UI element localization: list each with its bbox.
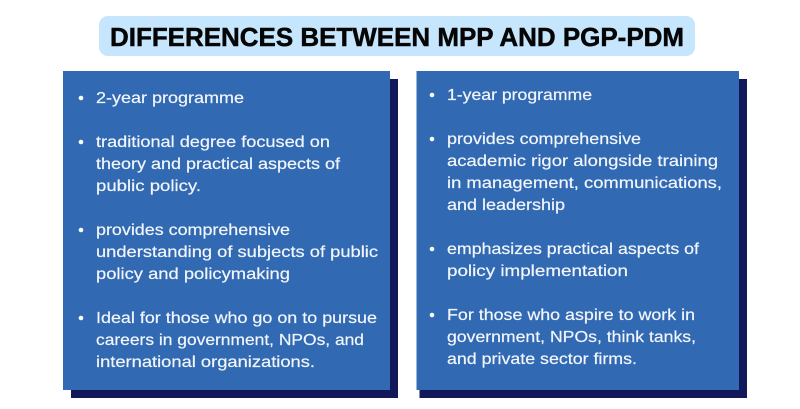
bullet: aspire to work: and private sector firms.: [447, 351, 637, 368]
bullet: comprehensive understanding: provides comprehensive: [96, 222, 290, 239]
bullet: practical aspects: policy implementation: [447, 263, 628, 280]
bullet: academic rigor: [430, 131, 722, 214]
bullet: academic rigor: and leadership: [447, 197, 565, 214]
bullet: traditional degree: [79, 134, 341, 195]
bullet: ideal for: international organizations.: [96, 354, 315, 371]
bullet: practical aspects: emphasizes practical aspects of: [447, 241, 700, 258]
bullet: comprehensive understanding: understanding of subjects of public: [96, 244, 378, 261]
bullet: aspire to work: [430, 307, 696, 368]
bullet: academic rigor: academic rigor alongside training: [447, 153, 718, 170]
bullet: aspire to work: For those who aspire to work in: [447, 307, 695, 324]
bullet: 2-year programme: 2-year programme: [96, 90, 244, 107]
bullet: comprehensive understanding: [79, 222, 378, 283]
bullet: academic rigor: provides comprehensive: [447, 131, 641, 148]
bullet: ideal for: Ideal for those who go on to pursue: [96, 310, 377, 327]
bullet: comprehensive understanding: policy and policymaking: [96, 266, 290, 283]
bullet: ideal for: [79, 310, 377, 371]
bullet: 1-year programme: 1-year programme: [447, 87, 592, 104]
bullet: practical aspects: [430, 241, 700, 280]
bullet: ideal for: careers in government, NPOs, and: [96, 332, 364, 349]
bullet: traditional degree: public policy.: [96, 178, 201, 195]
bullet: aspire to work: government, NPOs, think tanks,: [447, 329, 696, 346]
title: DIFFERENCES BETWEEN MPP AND PGP-PDM: [110, 22, 684, 52]
bullet: academic rigor: in management, communications,: [447, 175, 722, 192]
panel: MPP: [63, 71, 398, 398]
panel: PGP-PDM: [416, 71, 747, 398]
bullet: traditional degree: theory and practical aspects of: [96, 156, 341, 173]
bullet: traditional degree: traditional degree focused on: [96, 134, 330, 151]
